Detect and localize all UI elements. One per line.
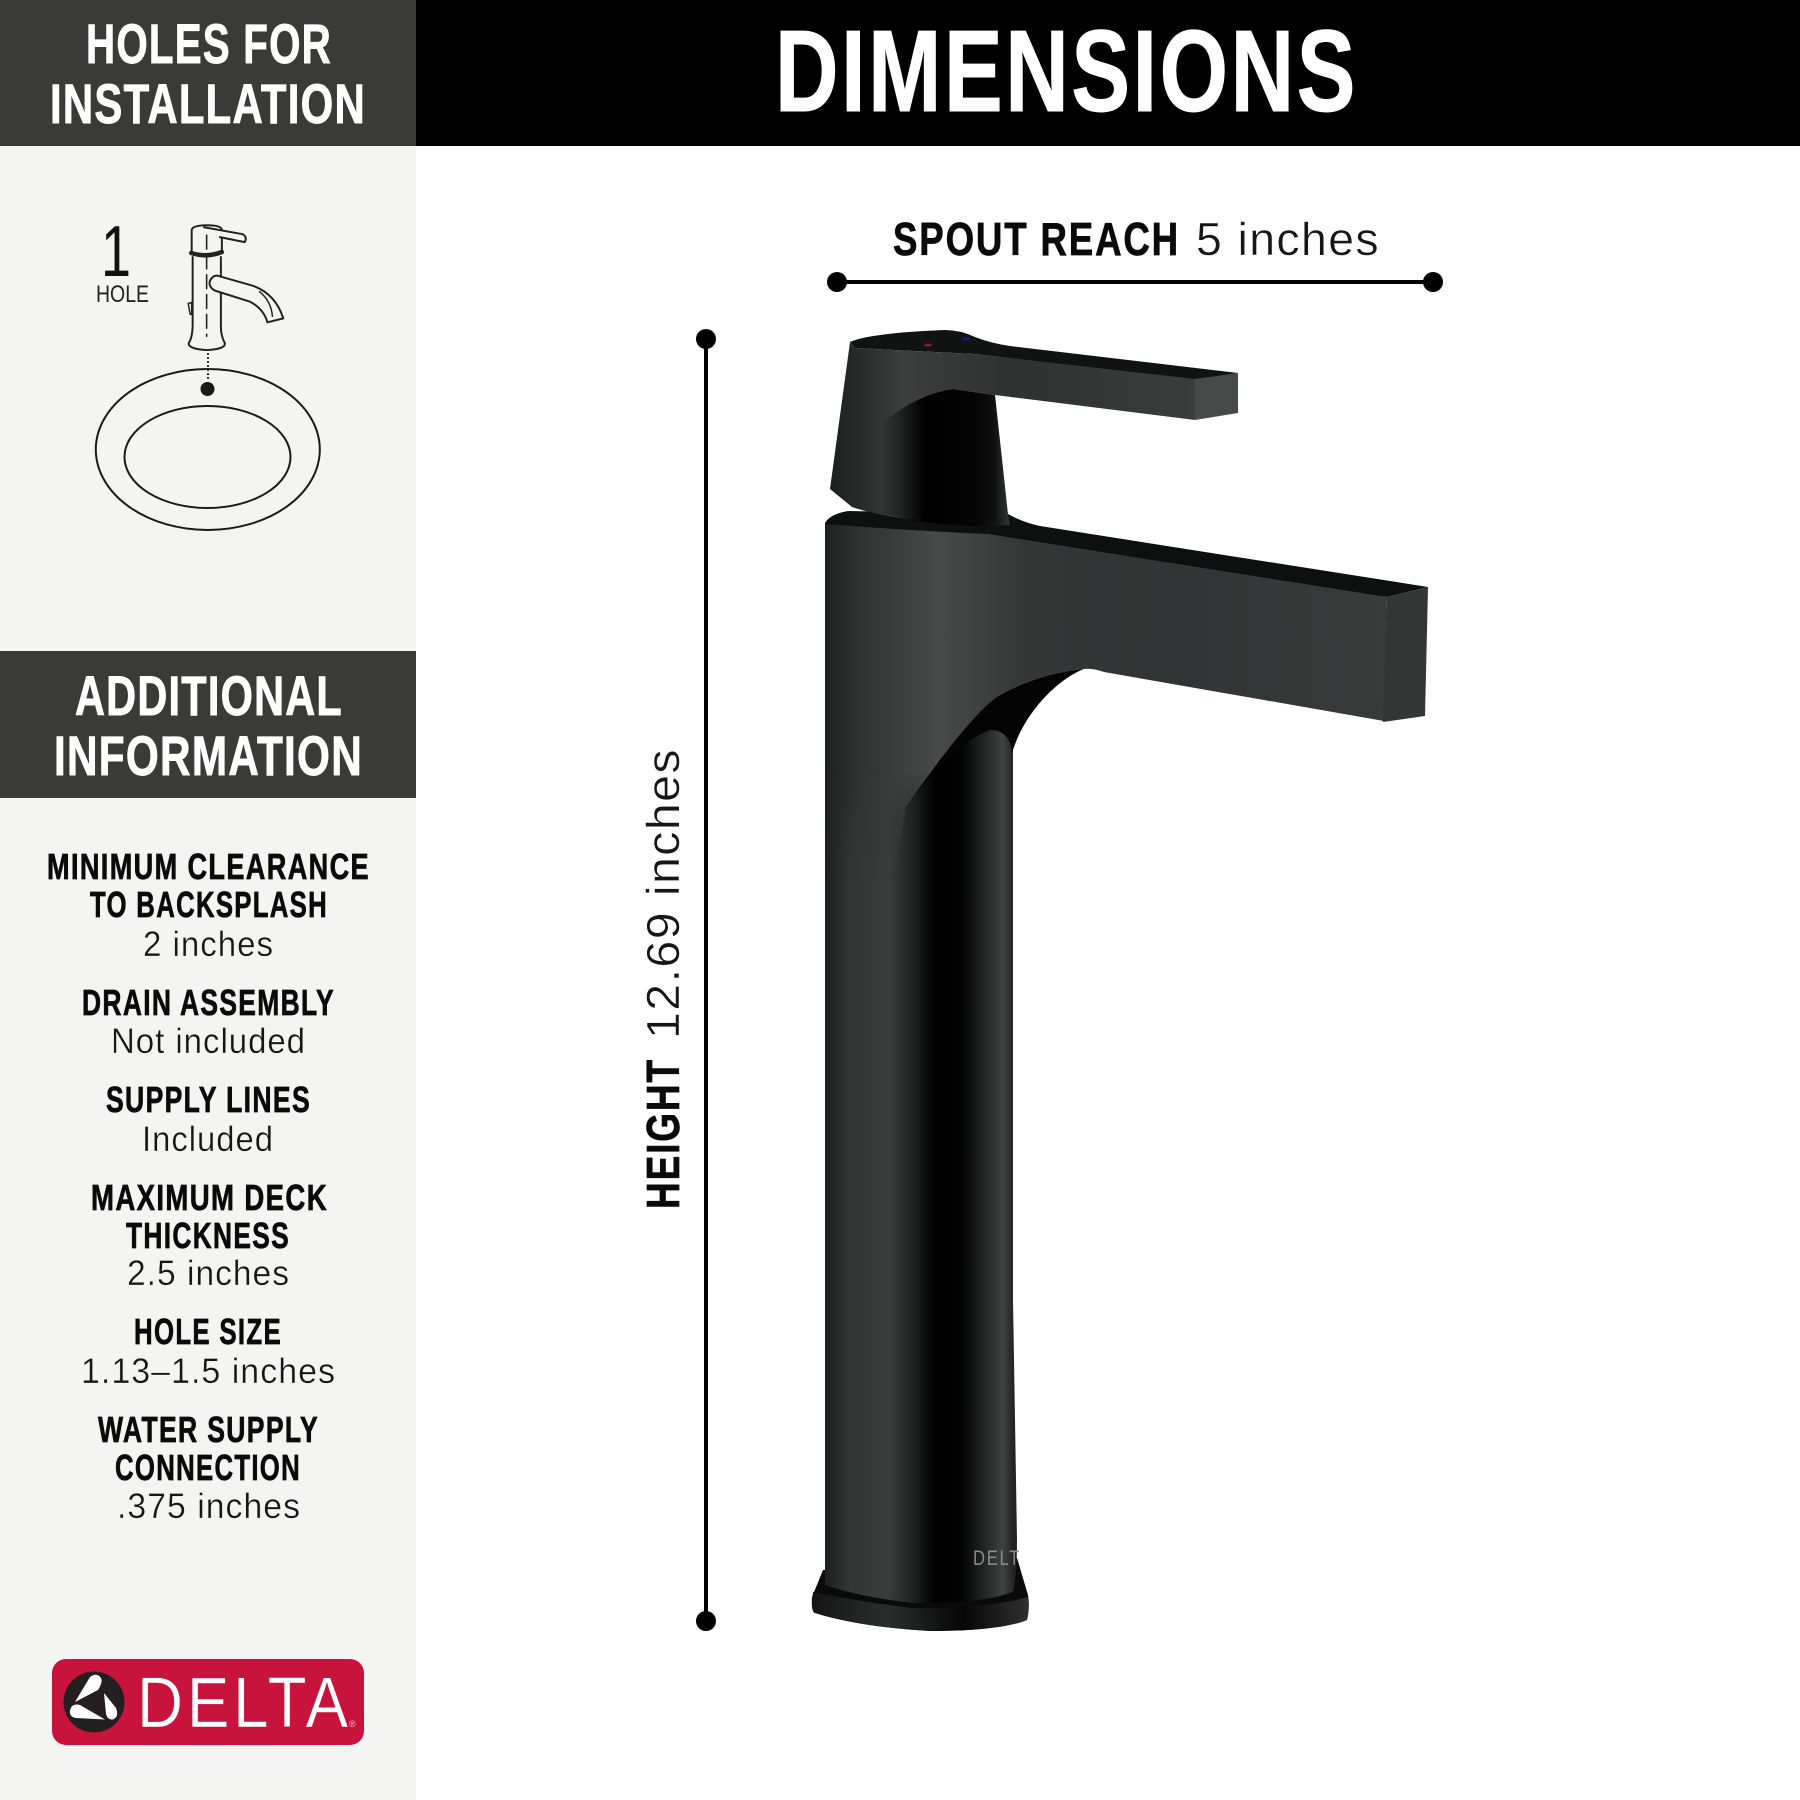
- spec: water supply connection: WATER SUPPLY: [98, 1409, 319, 1450]
- spec: hole size: [81, 1311, 336, 1391]
- spec: hole size: 1.13–1.5 inches: [81, 1352, 336, 1391]
- spec: minimum clearance: [47, 846, 370, 964]
- spec: maximum deck thickness: MAXIMUM DECK: [91, 1177, 328, 1218]
- label: spout reach: 5 inches: [1196, 213, 1380, 265]
- spec: drain assembly: Not included: [111, 1022, 306, 1061]
- lever top face: [850, 330, 1238, 380]
- lever end: [1195, 373, 1238, 420]
- heading: holes for installation: INSTALLATION: [50, 72, 366, 135]
- spec: minimum clearance: 2 inches: [143, 925, 274, 964]
- label: height: [637, 748, 689, 1209]
- spec: water supply connection: [98, 1409, 319, 1526]
- spec: water supply connection: CONNECTION: [115, 1447, 301, 1488]
- logo: delta: [52, 1659, 364, 1745]
- spec: maximum deck thickness: THICKNESS: [126, 1215, 290, 1256]
- icon: sink basin with mounting hole: [96, 353, 320, 530]
- heading: additional information: [0, 651, 416, 798]
- neck: [880, 389, 1010, 526]
- faucet base front band: [812, 1592, 1029, 1631]
- logo: delta: ®: [349, 1719, 356, 1729]
- label: spout reach: SPOUT REACH: [893, 213, 1180, 265]
- icon: one hole count: [96, 212, 149, 308]
- arrow: spout reach dimension line: [827, 272, 1443, 292]
- heading: additional information: INFORMATION: [54, 724, 363, 787]
- heading: additional information: ADDITIONAL: [75, 664, 343, 727]
- label: height: 12.69 inches: [637, 748, 689, 1039]
- label: height: HEIGHT: [637, 1058, 689, 1209]
- faucet base rim: [812, 1558, 1029, 1631]
- lever front face: [830, 342, 1195, 522]
- brand mark on column: DELT: [973, 1547, 1021, 1570]
- arrow: height dimension line: [696, 329, 716, 1631]
- spec: maximum deck thickness: [91, 1177, 328, 1293]
- spec: drain assembly: [82, 982, 335, 1061]
- faucet photo: [812, 330, 1428, 1631]
- spec: drain assembly: DRAIN ASSEMBLY: [82, 982, 335, 1023]
- icon: faucet line drawing: [188, 225, 283, 350]
- spec: maximum deck thickness: 2.5 inches: [127, 1254, 290, 1293]
- spout end: [1383, 587, 1428, 722]
- icon: one hole count: HOLE: [96, 281, 149, 308]
- spout top face: [825, 511, 1428, 597]
- spec: water supply connection: .375 inches: [117, 1487, 301, 1526]
- icon: one hole count: 1: [101, 212, 131, 292]
- spec: minimum clearance: TO BACKSPLASH: [90, 884, 328, 925]
- heading: holes for installation: [0, 0, 416, 146]
- faucet column: [825, 540, 1017, 1603]
- title: dimensions: [416, 0, 1800, 146]
- arch shadow: [906, 669, 1084, 807]
- title: dimensions: DIMENSIONS: [775, 6, 1358, 136]
- heading: holes for installation: HOLES FOR: [86, 12, 332, 75]
- spec: supply lines: SUPPLY LINES: [106, 1079, 311, 1120]
- logo: delta: DELTA: [137, 1664, 352, 1743]
- sidebar background: [0, 0, 416, 1800]
- temperature marks: [924, 344, 932, 346]
- spec: supply lines: [106, 1079, 311, 1159]
- spec: supply lines: Included: [142, 1120, 274, 1159]
- spec: hole size: HOLE SIZE: [134, 1311, 282, 1352]
- spout front face: [825, 524, 1387, 828]
- spec: minimum clearance: MINIMUM CLEARANCE: [47, 846, 370, 887]
